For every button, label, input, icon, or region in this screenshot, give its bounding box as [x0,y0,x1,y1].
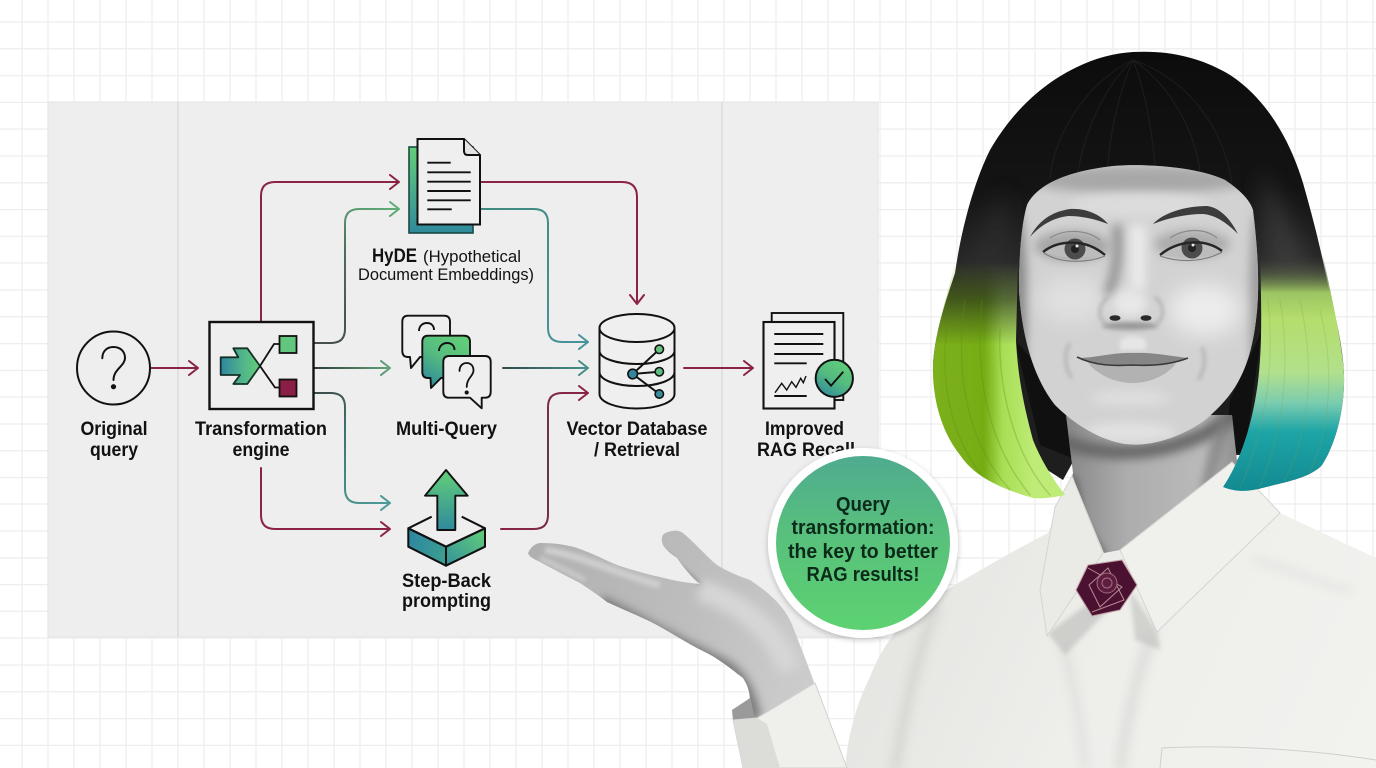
nose [1100,289,1163,330]
panel: pipeline diagram background [48,102,878,637]
callout text: transformation: [792,516,934,539]
arrow: Multi-Query to database [503,361,588,375]
hair: sheen [993,187,1308,272]
brows [1030,206,1238,237]
label: original query: query [90,440,138,461]
icon: green bubble [422,336,470,388]
shirt [846,502,1376,768]
rose pin [1076,560,1137,616]
label: original query: Original [80,419,148,440]
connector arrows [151,175,753,536]
mouth [1066,343,1204,383]
label: HyDE [358,246,534,284]
eyes [1043,230,1222,261]
label: Step-Back prompting: Step-Back [402,571,491,592]
node: Multi-Query [396,316,497,440]
label: transformation engine: engine [232,440,290,461]
node: vector database [566,314,708,461]
hand [525,528,820,728]
callout text [788,493,938,586]
hair: green left wing [933,262,1065,498]
arrow: Step-Back to database [501,386,588,529]
icon: front bubble [443,356,491,408]
label: vector database: Vector Database [566,419,708,440]
label: Step-Back prompting: prompting [402,591,491,612]
icon: back bubble [402,316,450,368]
label: HyDE: Document Embeddings) [358,265,534,284]
node: transformation engine [195,322,327,461]
node: improved RAG recall [757,313,855,461]
hair: black under-layer behind neck [1015,330,1262,458]
label: improved RAG recall [757,419,855,461]
label: Multi-Query: Multi-Query [396,419,497,440]
icon: database cylinder [600,314,674,408]
icon: report with check badge [764,313,853,408]
face [1009,160,1265,450]
arrow: HyDE to database (crimson) [481,182,644,304]
label: vector database [566,419,708,461]
node: original query [77,332,150,461]
cuff inner opening [732,698,757,721]
node: Step-Back prompting [402,470,491,612]
arrow: HyDE to database (teal) [481,209,588,349]
callout text: RAG results! [806,563,920,586]
collar [1040,462,1280,655]
label: transformation engine: Transformation [195,419,327,440]
arrow: engine to Multi-Query [314,361,390,375]
label: original query [80,419,148,461]
label: vector database: / Retrieval [594,440,680,461]
label: HyDE: (Hypothetical [423,247,521,266]
callout text: Query [836,493,891,516]
icon: question bubbles [402,316,491,408]
arrow: engine to HyDE (green) [314,202,399,343]
label: HyDE: HyDE [372,246,417,267]
arrow: original query to engine [151,361,198,375]
hair strands [945,60,1329,495]
presenter [525,52,1376,768]
icon: document stack [409,139,480,233]
hair: lime to teal right wing [1223,255,1344,491]
callout text: the key to better [788,540,938,563]
arrow: engine to HyDE (crimson) [261,175,399,321]
hair silhouette [933,52,1344,491]
icon: question circle [77,332,150,404]
sleeve cuff [733,683,847,768]
label: Step-Back prompting [402,571,491,612]
label: improved RAG recall: RAG Recall [757,440,855,461]
arrow: engine to Step-Back (crimson) [261,468,390,536]
arrow: engine to Step-Back (teal) [314,393,390,510]
callout: key message bubble [768,448,958,638]
icon: engine box [210,322,314,409]
label: transformation engine [195,419,327,461]
arrow: database to improved recall [684,361,753,375]
node: HyDE [358,139,534,284]
neck [1066,415,1237,553]
icon: up arrow on block [408,470,485,566]
label: improved RAG recall: Improved [765,419,844,440]
